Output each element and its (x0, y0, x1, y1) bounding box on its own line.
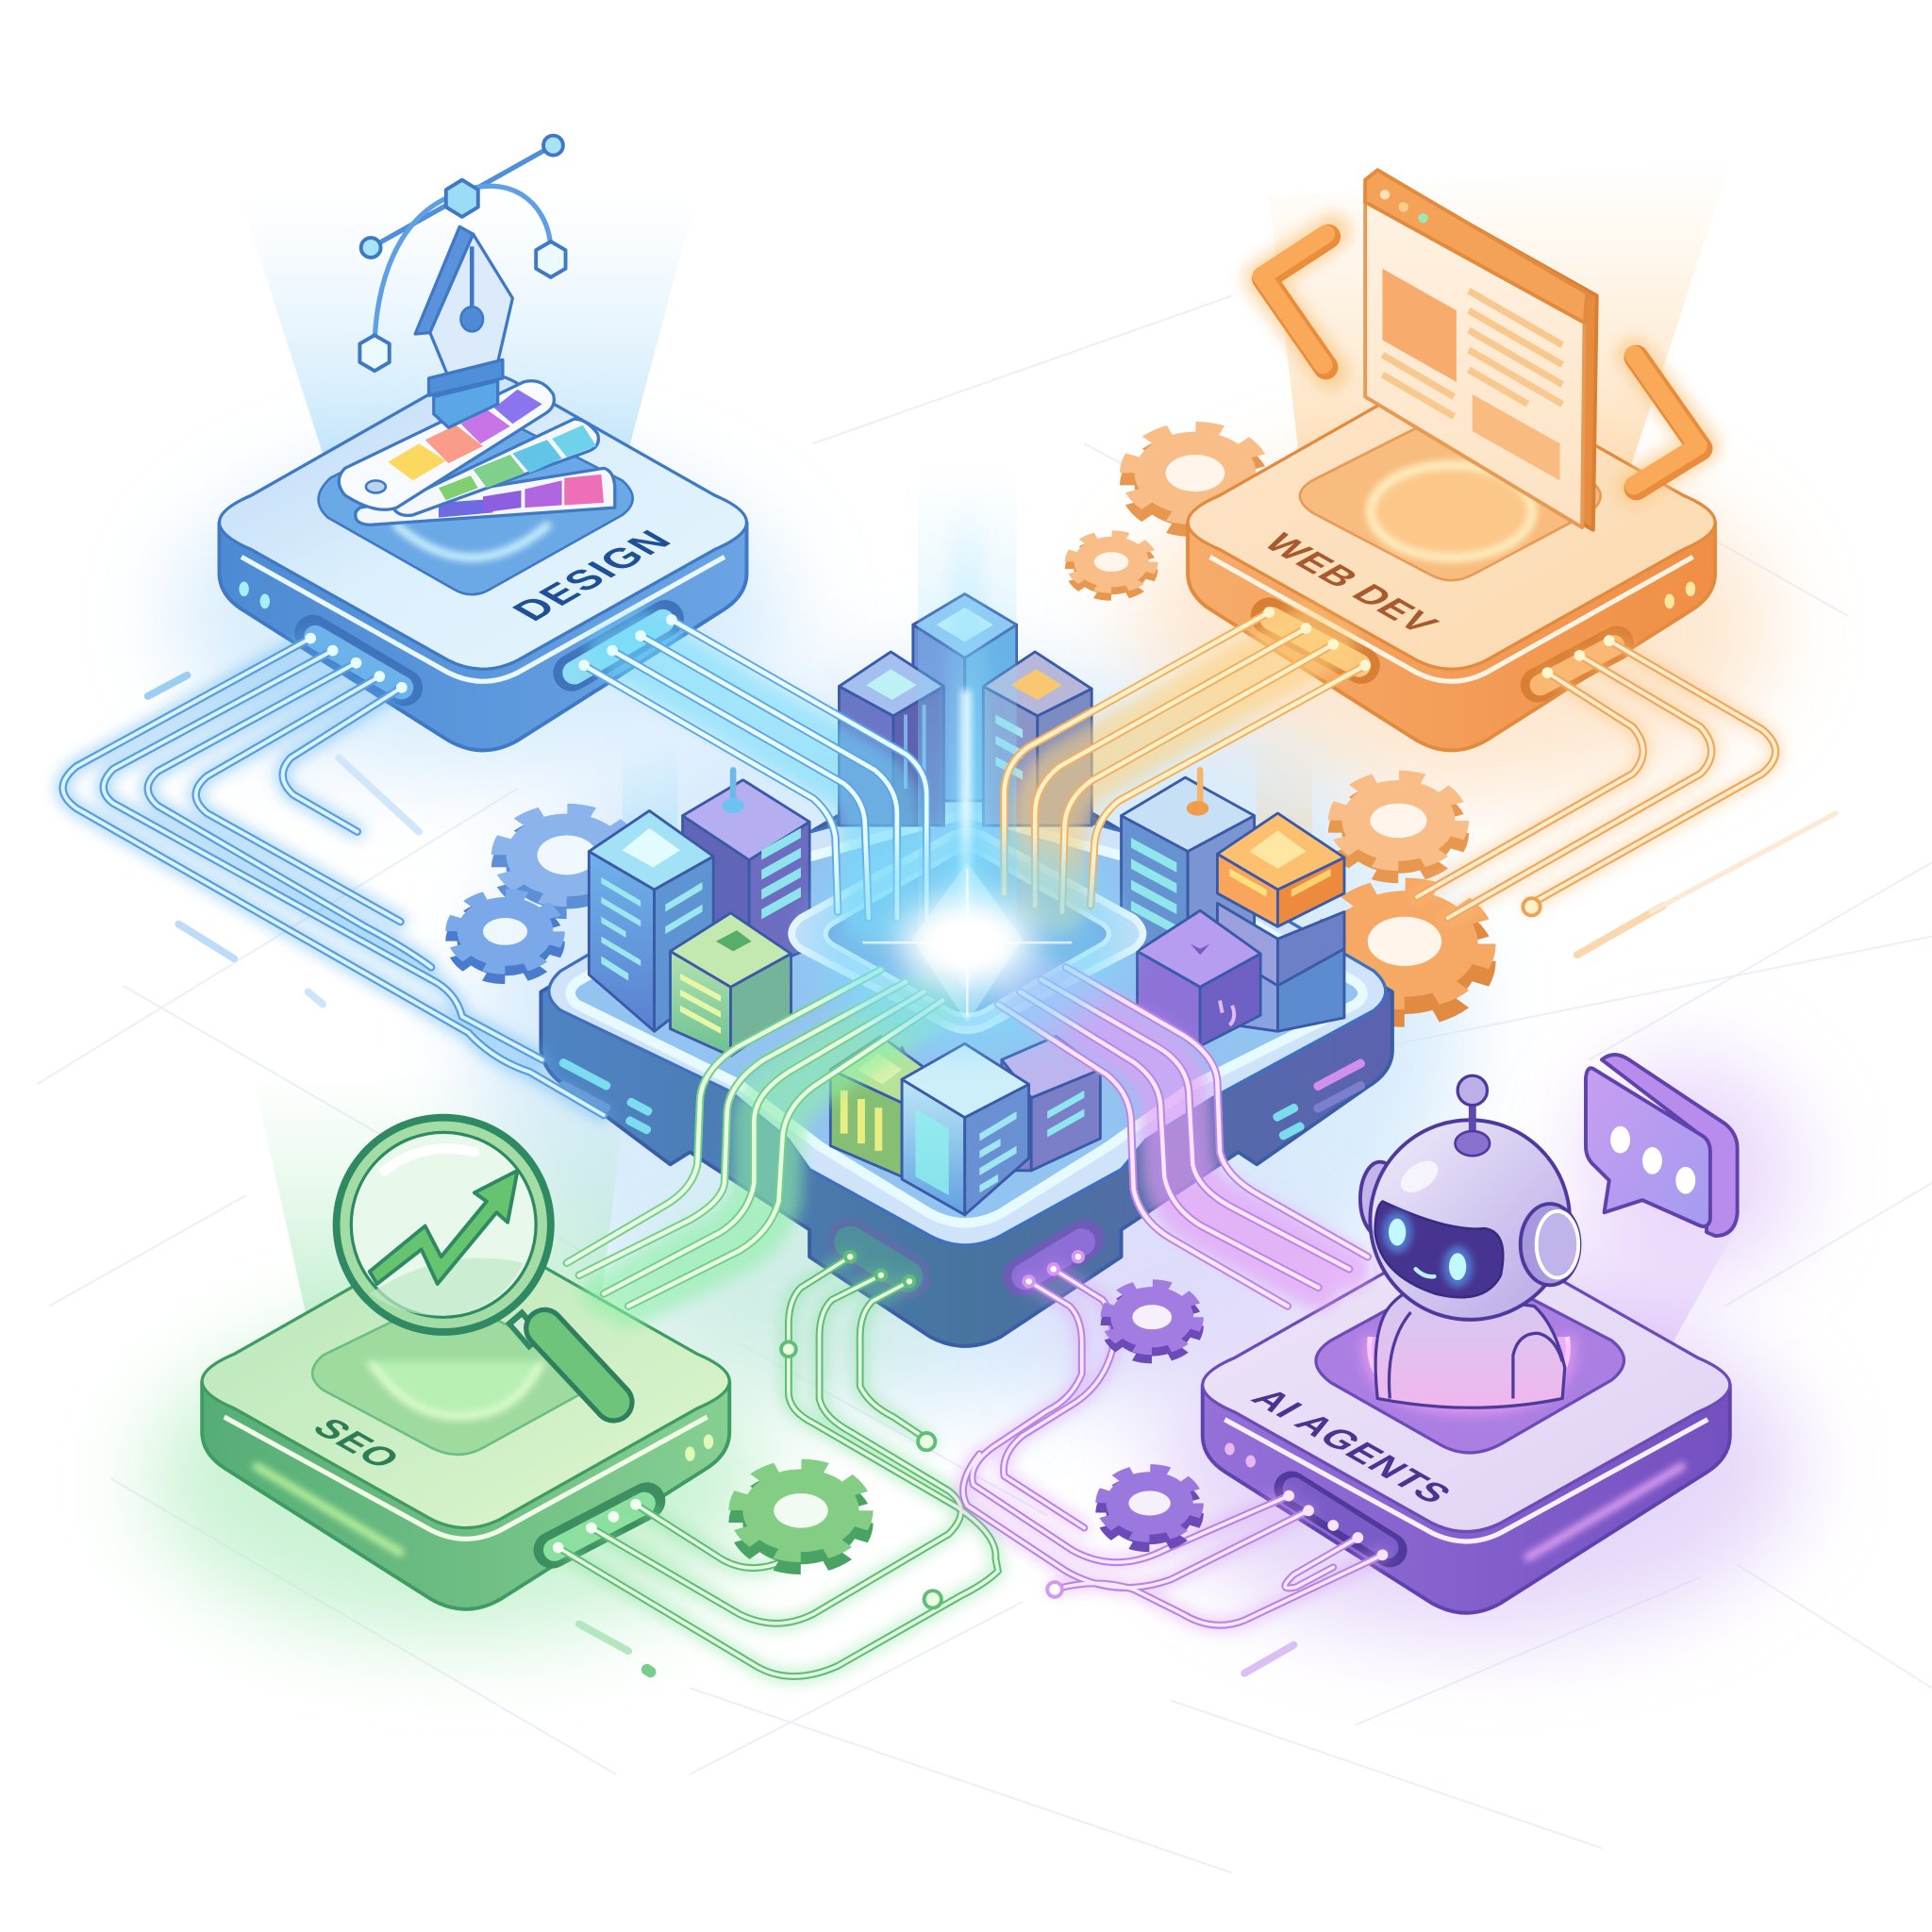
robot left ear (1360, 1162, 1400, 1236)
bubble depth (1602, 1055, 1738, 1236)
design icon pad (319, 409, 633, 594)
design top (219, 374, 747, 669)
handle (514, 1316, 537, 1343)
platform: design (219, 374, 747, 750)
pen nib (415, 226, 474, 334)
label: seo: SEO (303, 1413, 410, 1474)
robot visor (1375, 1201, 1503, 1297)
purple back-left tower (683, 780, 809, 974)
seo status bar (257, 1466, 400, 1553)
bezier handles (371, 145, 553, 345)
central light beam (918, 468, 1017, 986)
green front tower (830, 1036, 930, 1176)
seo pad neon ring (370, 1361, 542, 1417)
web dev pad neon ring (1370, 464, 1533, 558)
web dev right port (1538, 643, 1617, 685)
design base (219, 524, 747, 750)
seo port (552, 1501, 647, 1550)
hub front ports (850, 1240, 1084, 1276)
growth arrow (370, 1171, 518, 1284)
window depth (1377, 173, 1597, 530)
lavender front tower (1002, 1036, 1100, 1171)
web dev left port (1269, 616, 1361, 665)
port lights on platforms (305, 607, 1615, 1560)
wire bundle: core to seo (567, 970, 942, 1306)
wire bundle: core to ai agents (998, 967, 1368, 1306)
right-back tower (983, 652, 1091, 825)
server buildings back row (589, 594, 1344, 1056)
ai agents status dots (1224, 1442, 1256, 1468)
center-back tower (913, 594, 1017, 801)
ai agents neon ring (1370, 1337, 1568, 1407)
ai agents status bar (1528, 1466, 1682, 1557)
soft colour glows (148, 456, 1799, 1639)
web dev base (1188, 524, 1715, 750)
hub inner glow ring (571, 813, 1363, 1223)
light beams above platforms (241, 160, 1762, 1392)
label: ai agents: AI AGENTS (1242, 1383, 1461, 1509)
window title bar (1365, 170, 1587, 323)
stacked boxes right (1217, 813, 1344, 1031)
robot head (1370, 1120, 1570, 1320)
label: design: DESIGN (503, 524, 682, 626)
icon: browser window (1365, 170, 1597, 530)
web dev status dots (1665, 581, 1695, 608)
platform: seo (202, 1232, 729, 1609)
bubble dots (1610, 1126, 1695, 1194)
wire bundle: web dev to core (1004, 612, 1365, 912)
design status dots (239, 581, 270, 608)
platform: web dev (1188, 374, 1715, 750)
handle points (359, 136, 566, 371)
cyan front tower (902, 1043, 1029, 1215)
big left tower (589, 810, 713, 1031)
seo base (202, 1382, 729, 1609)
design right port (572, 619, 665, 673)
lens ring (333, 1114, 555, 1336)
central reactor pad (791, 832, 1142, 1030)
robot body (1375, 1290, 1565, 1407)
icon: speech bubble (1586, 1055, 1738, 1236)
window body (1365, 185, 1585, 527)
bubble face (1586, 1068, 1710, 1226)
hub left status bars (558, 1058, 654, 1136)
design pad neon arc (394, 524, 550, 558)
label: web dev: WEB DEV (1255, 528, 1448, 640)
window controls (1380, 190, 1428, 223)
ai agents top (1203, 1236, 1730, 1532)
ai agents icon pad (1316, 1275, 1624, 1453)
purple right tower (1138, 910, 1260, 1046)
gears: green and purple (739, 1285, 1196, 1567)
stems rising from towers (722, 770, 1208, 816)
right blue tower (1122, 777, 1255, 974)
icon: magnifier with growth chart (333, 1114, 613, 1402)
wire bundle: design to hub (left) (63, 639, 604, 1115)
wire bundle: design to core (584, 620, 926, 918)
design left port (313, 633, 404, 688)
icon: colour swatches (339, 381, 615, 525)
web dev icon pad (1300, 416, 1601, 580)
wire bundle: web dev right (1417, 641, 1775, 918)
ai agents port (1291, 1489, 1390, 1550)
ai agents base (1203, 1386, 1730, 1613)
green tower (671, 913, 791, 1056)
seo status dots (685, 1434, 713, 1461)
front buildings (830, 1036, 1100, 1215)
robot antenna (1470, 1096, 1475, 1140)
hub side walls (541, 740, 1392, 1346)
seo icon pad (312, 1304, 591, 1455)
wire bundle: hub to seo (558, 1252, 998, 1676)
gears: orange (1072, 428, 1483, 1018)
window text lines (1382, 291, 1562, 416)
hub top surfaces (549, 789, 1386, 1245)
left-back tower (839, 652, 943, 825)
icon: code brackets (1261, 232, 1703, 488)
gears: blue (454, 810, 632, 978)
web dev top (1188, 374, 1715, 669)
wire bundle: hub to ai agents (963, 1252, 1382, 1625)
icon: pen tool (359, 136, 566, 427)
window lower block (1473, 394, 1560, 480)
seo top (202, 1232, 729, 1528)
window image block (1382, 269, 1457, 382)
pen collar (429, 359, 503, 395)
core glow (813, 838, 1122, 1047)
robot right ear (1521, 1204, 1579, 1285)
platform: ai agents (1203, 1236, 1730, 1613)
robot eyes (1382, 1211, 1473, 1288)
decorative dashes (148, 675, 1836, 1674)
icon: robot (1360, 1075, 1579, 1407)
central hub platform (541, 740, 1392, 1346)
hub right status bars (1272, 1058, 1366, 1141)
